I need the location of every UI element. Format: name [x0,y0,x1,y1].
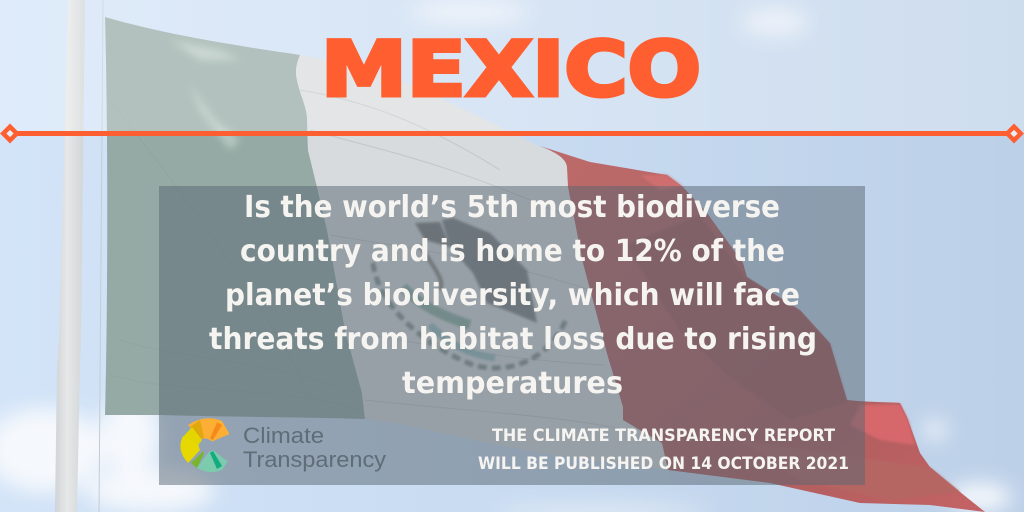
main statement text: country and is home to 12% of the [240,234,785,269]
flag: red stripe [540,146,985,512]
title: MEXICO [321,24,701,114]
flag: green stripe [105,17,365,419]
main statement text: threats from habitat loss due to rising [209,322,817,357]
publication notice: THE CLIMATE TRANSPARENCY REPORT [492,426,836,445]
publication notice: WILL BE PUBLISHED ON 14 OCTOBER 2021 [478,454,849,473]
top light overlay above divider [0,0,1024,133]
main statement text: temperatures [402,366,623,401]
flag: white stripe [296,55,668,470]
logo wordmark: Transparency [243,447,386,472]
flagpole [55,0,103,512]
flag: fold lines [110,90,625,430]
logo wordmark [243,423,386,472]
main statement text: planet’s biodiversity, which will face [225,278,800,313]
main statement text: Is the world’s 5th most biodiverse [244,190,780,225]
logo wordmark: Climate [243,423,324,448]
logo icon: colored ring [180,418,230,472]
flag: highlights on green [170,40,240,150]
divider line with diamond ends [3,127,1021,140]
flag: coat of arms [373,218,567,368]
text panel: translucent overlay [159,186,865,485]
main statement text [209,190,817,401]
logo: Climate Transparency [180,418,386,472]
publication notice [478,426,849,473]
flag: red folds [625,175,960,500]
